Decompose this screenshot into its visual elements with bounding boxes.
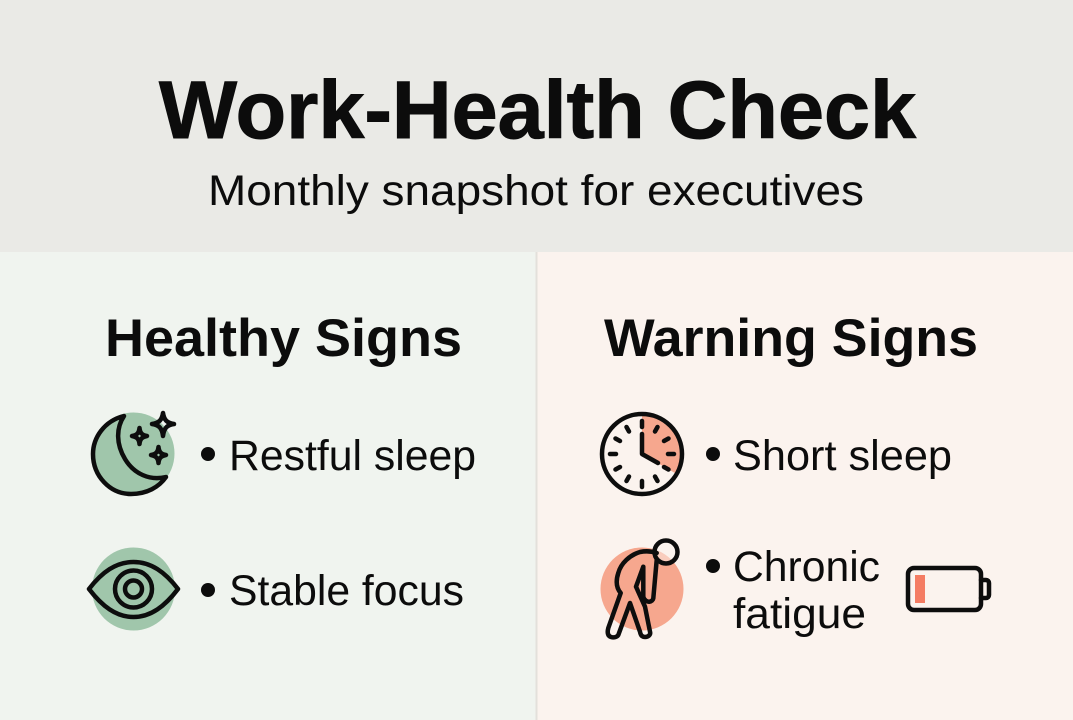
icon: eye bbox=[89, 548, 178, 630]
bullet bbox=[201, 583, 215, 597]
panel: warning signs bbox=[600, 309, 989, 638]
label: chronic fatigue bbox=[733, 543, 880, 638]
icon: clock bbox=[602, 414, 682, 494]
label: stable focus: Stable focus bbox=[229, 567, 464, 615]
subtitle: Monthly snapshot for executives bbox=[208, 167, 864, 215]
bullet bbox=[706, 559, 720, 573]
heading: warning signs: Warning Signs bbox=[604, 309, 978, 368]
heading: healthy signs: Healthy Signs bbox=[105, 309, 462, 368]
icon: low battery bbox=[908, 568, 989, 610]
bullet bbox=[706, 447, 720, 461]
label: chronic fatigue: Chronic bbox=[733, 543, 880, 591]
label: restful sleep: Restful sleep bbox=[229, 432, 476, 480]
label: chronic fatigue: fatigue bbox=[733, 590, 866, 638]
bullet bbox=[201, 447, 215, 461]
title: Work-Health Check bbox=[159, 65, 916, 156]
icon: tired person bbox=[600, 540, 684, 637]
label: short sleep: Short sleep bbox=[733, 432, 952, 480]
panel: healthy signs bbox=[89, 309, 476, 630]
icon: moon and stars bbox=[92, 412, 174, 494]
